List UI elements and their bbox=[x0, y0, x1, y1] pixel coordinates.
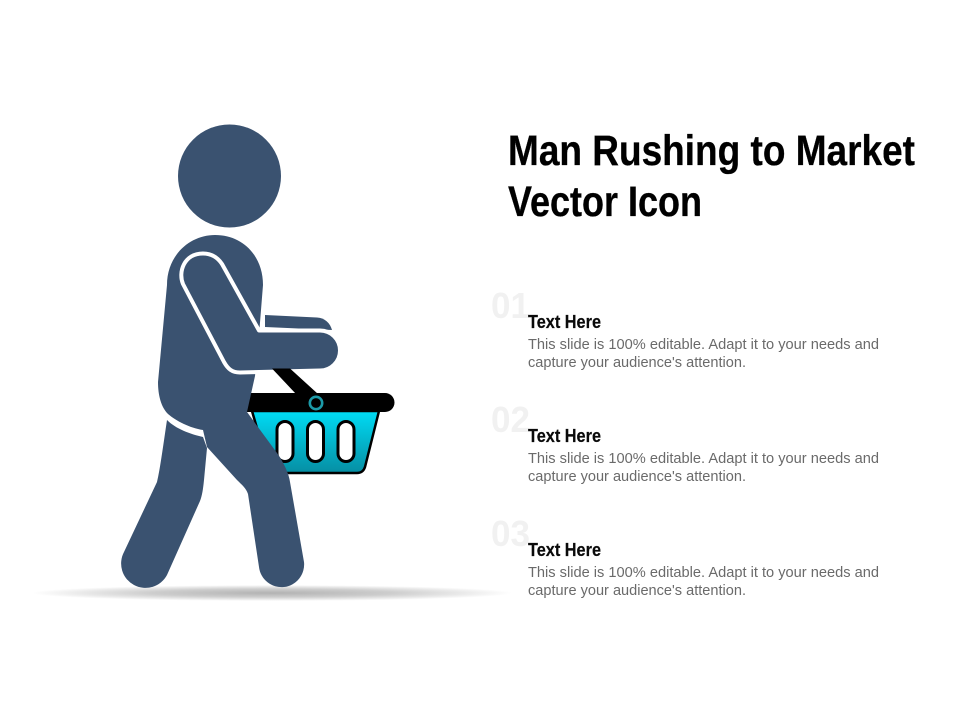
heading 01: Text Here bbox=[528, 312, 601, 332]
body 01: This slide is 100% editable. Adapt it to your needs and bbox=[528, 337, 879, 353]
title bbox=[508, 127, 915, 226]
item 01 bbox=[491, 285, 879, 371]
basket handle bbox=[272, 368, 318, 394]
body 03 bbox=[528, 565, 879, 599]
near arm bbox=[181, 254, 340, 372]
item 03 bbox=[491, 513, 879, 599]
head bbox=[178, 124, 281, 228]
body 02 bbox=[528, 451, 879, 485]
basket ring bbox=[310, 397, 322, 409]
back leg bbox=[121, 420, 207, 588]
icon: shopping basket bbox=[240, 393, 395, 473]
basket rim bbox=[240, 393, 395, 412]
number 02: 02 bbox=[491, 399, 530, 440]
number 03: 03 bbox=[491, 513, 530, 554]
item 02 bbox=[491, 399, 879, 485]
body 02: This slide is 100% editable. Adapt it to your needs and bbox=[528, 451, 879, 467]
number 01: 01 bbox=[491, 285, 530, 326]
far hand bbox=[265, 315, 332, 330]
basket body bbox=[252, 411, 379, 473]
body 01 bbox=[528, 337, 879, 371]
title: Vector Icon bbox=[508, 178, 702, 226]
ground shadow bbox=[32, 585, 512, 601]
icon: man walking bbox=[121, 124, 340, 588]
torso and front leg bbox=[158, 235, 304, 587]
body 03: This slide is 100% editable. Adapt it to your needs and bbox=[528, 565, 879, 581]
body 02: capture your audience's attention. bbox=[528, 469, 746, 485]
basket slots bbox=[277, 422, 354, 462]
heading 02: Text Here bbox=[528, 426, 601, 446]
body 01: capture your audience's attention. bbox=[528, 355, 746, 371]
heading 03: Text Here bbox=[528, 540, 601, 560]
body 03: capture your audience's attention. bbox=[528, 583, 746, 599]
